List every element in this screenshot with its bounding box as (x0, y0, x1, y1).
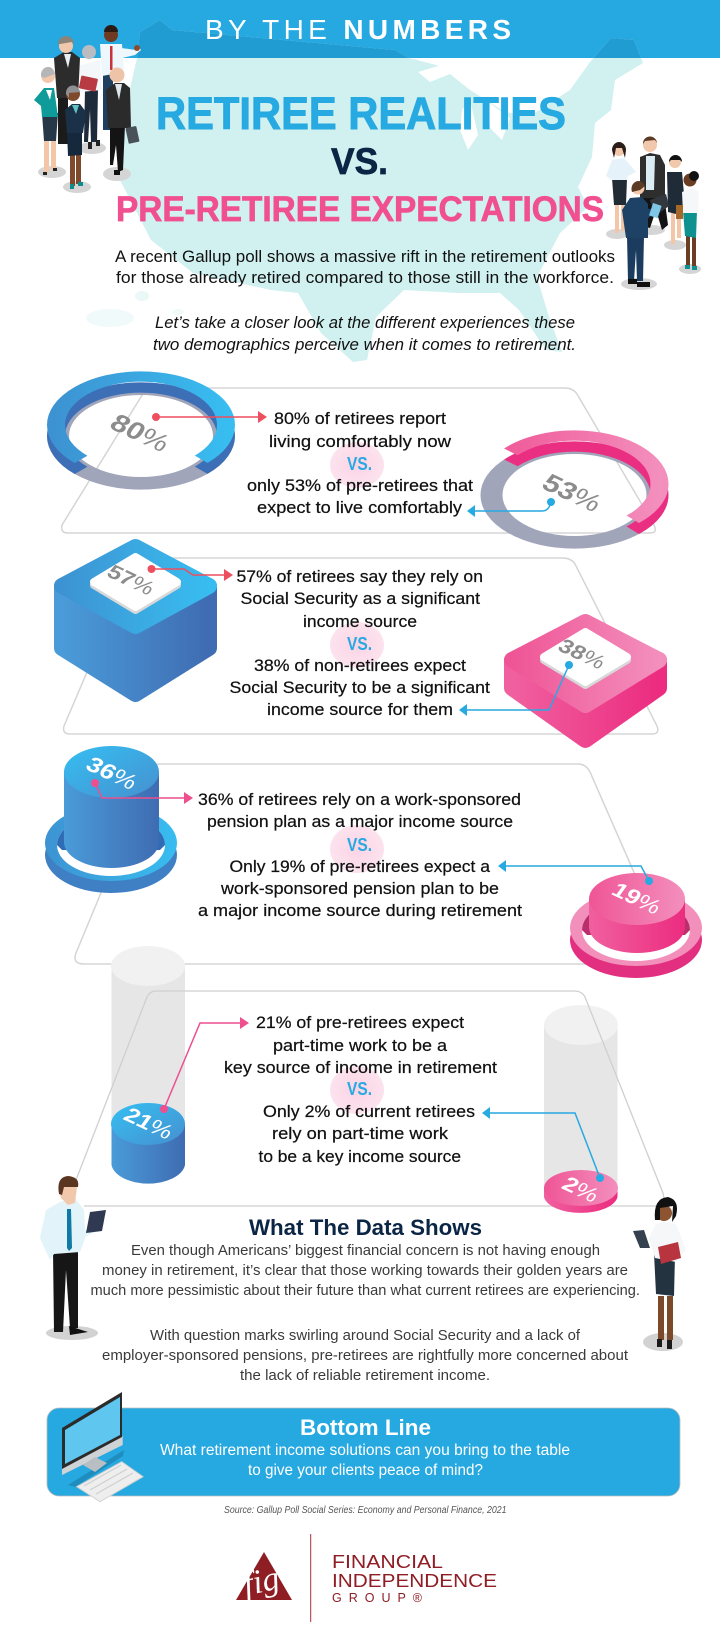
vs badge (330, 825, 384, 873)
comparison text: income source for them (267, 701, 453, 719)
panel: part-time work (76, 946, 664, 1213)
arrow to pre-retiree text (160, 1017, 249, 1113)
header banner (0, 0, 720, 58)
cylinder chart: 2%: 2% (558, 1172, 604, 1207)
panel: pension plans (45, 746, 702, 978)
logo: financial independence group (236, 1534, 497, 1622)
arrow to pre-retiree text (459, 661, 573, 716)
arrow to pre-retiree text (467, 498, 555, 517)
comparison text (230, 568, 490, 719)
comparison text: part-time work to be a (273, 1037, 448, 1055)
intro text: for those already retired compared to those still in the workforce. (116, 269, 614, 287)
arrow to retiree text (148, 565, 233, 581)
logo wordmark: FINANCIAL (332, 1552, 443, 1572)
title: vs: VS. (331, 141, 388, 182)
title: pre-retiree expectations: PRE-RETIREE EXPECTATIONS (116, 190, 604, 229)
cube chart: 38% (512, 622, 659, 740)
text block: social security concern: With question marks swirling around Social Security and a lack of (150, 1327, 581, 1344)
text block: data findings: much more pessimistic about their future than what current retirees are experiencing. (90, 1282, 640, 1299)
text block: data findings: Even though Americans’ biggest financial concern is not having enough (131, 1242, 600, 1259)
woman in white shirt (77, 45, 102, 149)
icon: fig triangle: fig (240, 1560, 283, 1603)
source note: Source: Gallup Poll Social Series: Economy and Personal Finance, 2021 (224, 1505, 506, 1516)
cube chart: 38%: 38% (554, 634, 611, 674)
cylinder chart: 2% (544, 1170, 618, 1213)
cylinder chart: 36% (45, 746, 177, 893)
woman with black skirt (606, 142, 636, 233)
cylinder chart: 21%: 21% (119, 1103, 178, 1144)
text block: data findings: money in retirement, it’s clear that those working towards their golden years are (102, 1262, 628, 1279)
illustration: group of pre-retirees (606, 136, 701, 290)
logo wordmark (332, 1552, 497, 1605)
intro text (115, 248, 615, 287)
cylinder chart: 19%: 19% (607, 878, 666, 919)
panel outline (75, 764, 668, 964)
icon: desktop computer (62, 1392, 143, 1502)
comparison text (198, 791, 522, 920)
woman in teal skirt (676, 171, 699, 270)
cube chart: 57%: 57% (103, 560, 160, 600)
arrow to retiree text (482, 1107, 604, 1182)
map of the United States (86, 20, 643, 362)
panel: social security (62, 547, 659, 740)
grey cylinder right (544, 1005, 618, 1190)
comparison text: rely on part-time work (272, 1125, 449, 1143)
question text (160, 1442, 570, 1479)
comparison text: expect to live comfortably (257, 499, 463, 517)
ring chart: 80% (56, 377, 226, 484)
vs badge: VS. (347, 1079, 372, 1099)
vs badge: VS. (347, 634, 372, 654)
cylinder chart: 21% (111, 1103, 185, 1184)
intro italic text: two demographics perceive when it comes to retirement. (153, 336, 576, 354)
text block: data findings (90, 1242, 640, 1299)
man with red tie (100, 25, 141, 130)
vs badge (330, 622, 384, 668)
man with grey hair (54, 36, 80, 144)
panel outline (76, 991, 664, 1206)
logo wordmark: INDEPENDENCE (332, 1571, 497, 1591)
question text: What retirement income solutions can you bring to the table (160, 1442, 570, 1459)
bald man with briefcase (106, 68, 140, 175)
text block: social security concern: employer-sponsored pensions, pre-retirees are rightfully more concerned about (102, 1347, 629, 1364)
comparison text: only 53% of pre-retirees that (247, 477, 473, 495)
comparison text (224, 1014, 497, 1166)
intro text: A recent Gallup poll shows a massive rift in the retirement outlooks (115, 248, 615, 266)
ring chart: 80%: 80% (105, 409, 175, 457)
logo wordmark: GROUP® (332, 1591, 423, 1605)
comparison text: pension plan as a major income source (207, 813, 513, 831)
panel outline (64, 558, 658, 734)
comparison text: income source (303, 613, 417, 631)
heading: by the numbers: BY THE NUMBERS (205, 14, 517, 45)
comparison text: living comfortably now (269, 433, 451, 451)
woman in dark jacket (667, 155, 685, 244)
grey cylinder left (111, 946, 185, 1125)
cube chart: 57% (62, 547, 209, 694)
icon: fig triangle (236, 1552, 292, 1603)
heading: bottom line: Bottom Line (300, 1415, 431, 1440)
comparison text: to be a key income source (258, 1148, 461, 1166)
woman in navy suit (65, 85, 86, 189)
intro italic text: Let’s take a closer look at the different experiences these (155, 314, 575, 332)
heading: what the data shows: What The Data Shows (249, 1215, 482, 1240)
panel outline (62, 388, 655, 533)
title: retiree realities: RETIREE REALITIES (156, 88, 566, 139)
comparison text: Social Security as a significant (240, 590, 480, 608)
ring chart: 53% (490, 436, 660, 543)
text block: social security concern (102, 1327, 629, 1384)
cylinder chart: 19% (570, 873, 702, 978)
cylinder chart: 36%: 36% (81, 753, 142, 795)
comparison text: a major income source during retirement (198, 902, 522, 920)
comparison text: Only 19% of pre-retirees expect a (230, 858, 491, 876)
comparison text: 57% of retirees say they rely on (236, 568, 483, 586)
intro italic text (153, 314, 576, 354)
vs badge: VS. (347, 454, 372, 474)
comparison text: 36% of retirees rely on a work-sponsored (198, 791, 521, 809)
comparison text: 80% of retirees report (274, 410, 446, 428)
question text: to give your clients peace of mind? (248, 1462, 483, 1479)
vs badge: VS. (347, 835, 372, 855)
comparison text (247, 410, 473, 517)
comparison text: 21% of pre-retirees expect (256, 1014, 464, 1032)
arrow to retiree text (91, 779, 193, 804)
man in navy suit with tablet (622, 181, 669, 287)
panel: bottom line (47, 1392, 680, 1502)
ring chart: 53%: 53% (537, 469, 607, 517)
vs badge (330, 442, 384, 488)
illustration: man with tablet (40, 1176, 106, 1340)
man in black jacket (640, 136, 668, 230)
panel: comfort in retirement (56, 377, 660, 543)
illustration: group of retirees (34, 25, 141, 193)
arrow to pre-retiree text (498, 860, 653, 885)
comparison text: work-sponsored pension plan to be (220, 880, 499, 898)
vs badge (330, 1066, 384, 1114)
illustration: woman with tablet and folder (633, 1197, 686, 1351)
comparison text: Social Security to be a significant (230, 679, 490, 697)
text block: social security concern: the lack of reliable retirement income. (240, 1367, 490, 1384)
arrow to retiree text (152, 411, 267, 423)
woman in teal jacket (34, 67, 58, 175)
comparison text: Only 2% of current retirees (263, 1103, 475, 1121)
comparison text: 38% of non-retirees expect (254, 657, 466, 675)
comparison text: key source of income in retirement (224, 1059, 497, 1077)
